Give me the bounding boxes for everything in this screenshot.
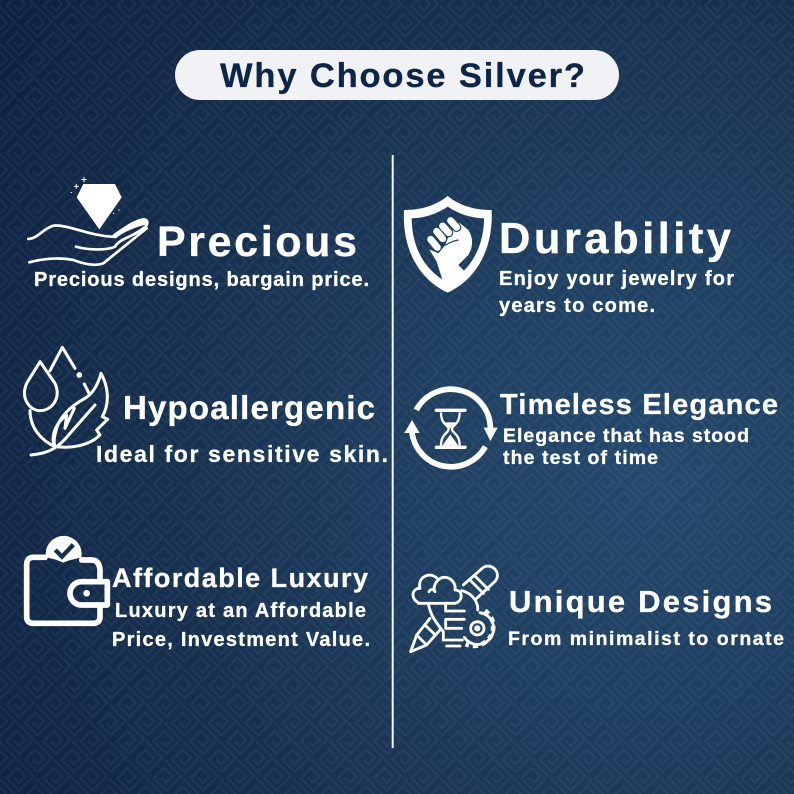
icon: water drops and feather — [25, 347, 108, 455]
description — [112, 600, 370, 651]
heading: Hypoallergenic — [123, 389, 375, 426]
panel: unique designs — [411, 566, 784, 652]
description: Enjoy your jewelry for — [499, 268, 734, 290]
description — [503, 425, 749, 469]
icon: hourglass with cycle arrows — [404, 389, 498, 467]
panel: precious — [28, 177, 369, 291]
icon: hand holding diamond — [28, 177, 147, 265]
description: Precious designs, bargain price. — [34, 269, 369, 291]
panel: hypoallergenic — [25, 347, 388, 467]
heading: Affordable Luxury — [112, 563, 368, 593]
description: the test of time — [503, 447, 658, 469]
description: From minimalist to ornate — [508, 628, 784, 650]
icon: wallet with coin — [27, 536, 107, 623]
title pill — [175, 50, 619, 100]
heading: Precious — [157, 218, 357, 266]
description: Luxury at an Affordable — [115, 600, 366, 622]
heading: Durability — [499, 215, 731, 263]
heading: Timeless Elegance — [500, 389, 778, 421]
panel: affordable luxury — [27, 536, 370, 651]
center divider — [392, 155, 394, 748]
icon: pencil, cloud, bulb and gear — [411, 566, 497, 652]
title pill: Why Choose Silver? — [220, 57, 585, 95]
description — [499, 268, 734, 317]
description: Elegance that has stood — [503, 425, 749, 447]
icon: shield with fist — [404, 196, 492, 293]
description: Ideal for sensitive skin. — [96, 441, 388, 467]
panel: timeless elegance — [404, 389, 778, 469]
heading: Unique Designs — [509, 584, 772, 619]
description: years to come. — [499, 295, 655, 317]
panel: durability — [404, 196, 734, 317]
description: Price, Investment Value. — [112, 629, 370, 651]
